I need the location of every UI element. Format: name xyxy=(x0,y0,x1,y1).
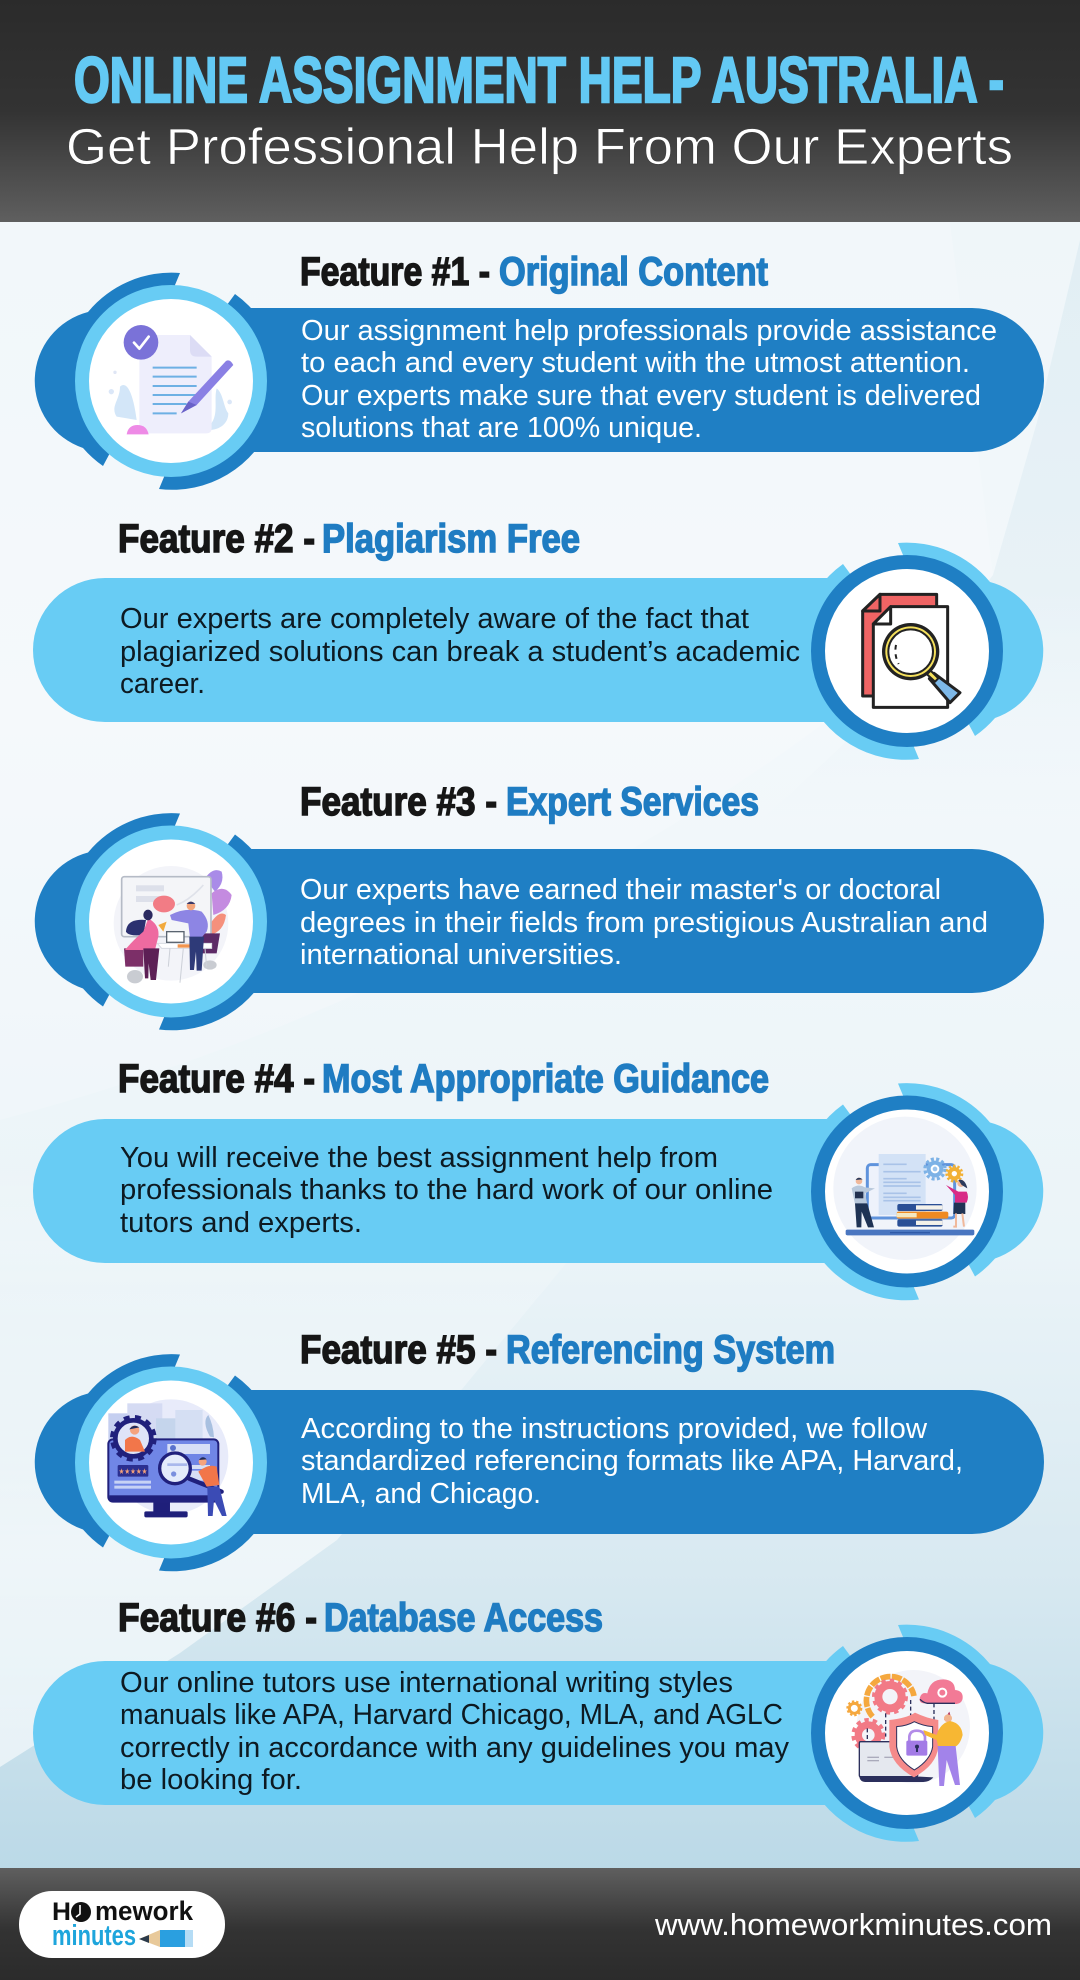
ring: feature 3 xyxy=(82,832,260,1010)
heading: feature 4: Most Appropriate Guidance xyxy=(322,1057,769,1101)
bar: feature 6 xyxy=(33,1661,907,1805)
logo: minutes xyxy=(52,1920,136,1952)
heading: feature 1: Feature #1 - xyxy=(300,250,490,294)
body text: feature 6: be looking for. xyxy=(120,1764,302,1796)
body text: feature 1: Our experts make sure that every student is delivered xyxy=(301,380,981,412)
bar: feature 4 xyxy=(33,1119,907,1263)
bar: feature 1 xyxy=(171,308,1044,452)
panel: feature 6 xyxy=(33,1596,1043,1842)
icon: documents and magnifier xyxy=(863,594,960,707)
body text: feature 6 xyxy=(120,1667,790,1796)
heading: feature 6: Feature #6 - xyxy=(118,1596,317,1640)
badge shape: feature 1 xyxy=(35,273,280,490)
logo: H xyxy=(52,1898,71,1926)
body text: feature 4 xyxy=(120,1142,773,1239)
body text: feature 5: According to the instructions provided, we follow xyxy=(301,1413,927,1445)
ring: feature 6 xyxy=(818,1644,996,1822)
panel: feature 5 xyxy=(35,1328,1044,1571)
heading: feature 5 xyxy=(300,1328,835,1372)
body text: feature 1 xyxy=(301,315,997,444)
body text: feature 3: Our experts have earned their master's or doctoral xyxy=(300,874,941,906)
icon: document and pen xyxy=(109,325,233,434)
body text: feature 2: Our experts are completely aware of the fact that xyxy=(120,603,749,635)
badge shape: feature 2 xyxy=(798,543,1043,760)
heading: feature 4: Feature #4 - xyxy=(118,1057,315,1101)
badge shape: feature 3 xyxy=(35,813,280,1030)
heading: feature 2: Feature #2 - xyxy=(118,517,315,561)
body text: feature 5 xyxy=(301,1413,963,1510)
body text: feature 2: plagiarized solutions can break a student’s academic xyxy=(120,636,800,668)
body text: feature 3: degrees in their fields from prestigious Australian and xyxy=(300,907,988,939)
logo xyxy=(19,1891,225,1958)
icon: monitor with magnifier: ★★★★★ xyxy=(119,1467,147,1476)
panel: feature 3 xyxy=(35,780,1044,1030)
badge shape: feature 6 xyxy=(798,1625,1043,1842)
panel: feature 2 xyxy=(33,517,1043,760)
website url: www.homeworkminutes.com xyxy=(654,1907,1052,1942)
body text: feature 6: correctly in accordance with any guidelines you may xyxy=(120,1732,790,1764)
body text: feature 1: solutions that are 100% unique. xyxy=(301,412,702,444)
subtitle: Get Professional Help From Our Experts xyxy=(66,118,1013,175)
body text: feature 5: MLA, and Chicago. xyxy=(301,1478,541,1510)
ring: feature 5 xyxy=(82,1374,260,1552)
icon: people at whiteboard xyxy=(114,866,232,983)
icon: security, gears and cloud xyxy=(847,1670,970,1786)
heading: feature 3 xyxy=(300,780,759,824)
body text: feature 2 xyxy=(120,603,800,700)
badge shape: feature 4 xyxy=(798,1083,1043,1300)
body text: feature 3: international universities. xyxy=(300,939,622,971)
heading: feature 6: Database Access xyxy=(324,1596,603,1640)
heading: feature 2: Plagiarism Free xyxy=(322,517,580,561)
heading: feature 5: Referencing System xyxy=(506,1328,835,1372)
bar: feature 5 xyxy=(171,1390,1044,1534)
header band xyxy=(0,0,1080,222)
body text: feature 4: You will receive the best assignment help from xyxy=(120,1142,718,1174)
ring: feature 4 xyxy=(818,1102,996,1280)
logo: mework xyxy=(95,1896,194,1926)
heading: feature 4 xyxy=(118,1057,769,1101)
body text: feature 1: to each and every student with the utmost attention. xyxy=(301,347,970,379)
heading: feature 1 xyxy=(300,250,768,294)
body text: feature 3 xyxy=(300,874,988,971)
ring: feature 1 xyxy=(82,292,260,470)
heading: feature 3: Feature #3 - xyxy=(300,780,497,824)
heading: feature 5: Feature #5 - xyxy=(300,1328,497,1372)
ring: feature 2 xyxy=(818,562,996,740)
icon: laptop, books and people xyxy=(833,1117,977,1260)
body text: feature 2: career. xyxy=(120,668,205,700)
panel: feature 4 xyxy=(33,1057,1043,1300)
heading: feature 3: Expert Services xyxy=(506,780,759,824)
bar: feature 3 xyxy=(171,849,1044,993)
body text: feature 4: tutors and experts. xyxy=(120,1207,362,1239)
footer band xyxy=(0,1868,1080,1980)
body text: feature 5: standardized referencing formats like APA, Harvard, xyxy=(301,1445,963,1477)
icon: monitor with magnifier xyxy=(108,1399,228,1517)
badge shape: feature 5 xyxy=(35,1354,280,1571)
panel: feature 1 xyxy=(35,250,1044,490)
heading: feature 6 xyxy=(118,1596,603,1640)
body text: feature 6: manuals like APA, Harvard Chicago, MLA, and AGLC xyxy=(120,1699,783,1731)
body text: feature 1: Our assignment help professionals provide assistance xyxy=(301,315,997,347)
bar: feature 2 xyxy=(33,578,907,722)
body text: feature 4: professionals thanks to the hard work of our online xyxy=(120,1174,773,1206)
heading: feature 1: Original Content xyxy=(499,250,768,294)
body text: feature 6: Our online tutors use international writing styles xyxy=(120,1667,733,1699)
heading: feature 2 xyxy=(118,517,580,561)
